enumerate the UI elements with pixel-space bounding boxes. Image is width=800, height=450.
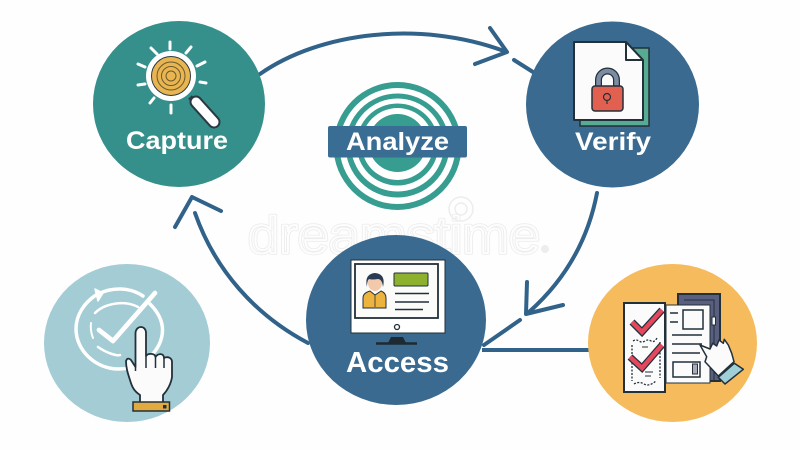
panel: verify <box>526 22 699 188</box>
arrow: capture to verify <box>260 28 533 74</box>
label: Capture: Capture <box>126 127 228 155</box>
panel: analyze <box>328 82 467 210</box>
icon: form document <box>666 305 716 383</box>
icon: hand pointing at form <box>700 339 743 384</box>
connector: access to documents <box>482 348 592 352</box>
panel: documents checklist <box>588 264 757 422</box>
icon: monitor with profile <box>351 260 445 344</box>
icon: concentric rings <box>334 82 462 210</box>
icon: magnifying glass with rays <box>138 42 214 122</box>
icon: checklist receipt <box>624 303 665 392</box>
watermark: dreamstime <box>248 207 540 265</box>
icon: circular check mark <box>76 289 162 369</box>
icon: locked document <box>574 42 649 126</box>
arrow: access to capture <box>175 197 308 343</box>
panel: touch confirmation <box>44 264 210 422</box>
label: Access: Access <box>346 347 449 379</box>
panel: capture <box>93 21 265 187</box>
label: Verify: Verify <box>575 128 651 156</box>
icon: back folder <box>678 294 720 381</box>
profile avatar <box>363 273 386 308</box>
panel: access <box>306 235 486 405</box>
icon: pointing hand <box>126 327 172 411</box>
arrow: verify to access <box>484 193 597 345</box>
label banner: Analyze: Analyze <box>346 128 449 156</box>
watermark: dreamstime <box>248 207 540 265</box>
